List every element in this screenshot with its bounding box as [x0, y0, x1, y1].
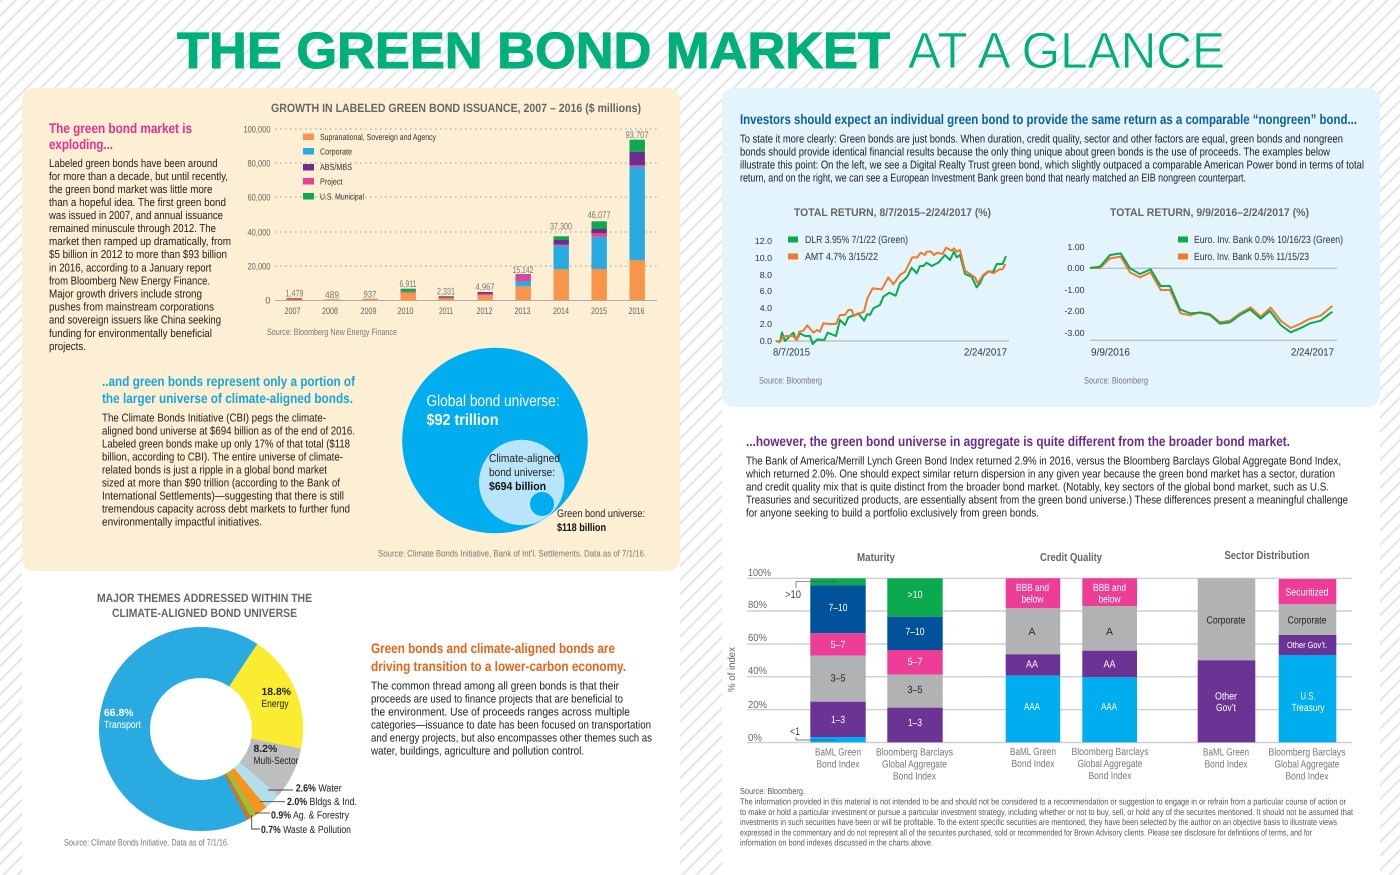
text block: however the green bond universe: for anyone seeking to build a portfolio exclusively from green bonds.	[746, 508, 1039, 520]
donut labels: Multi-Sector	[254, 756, 299, 767]
panel: aggregate universe comparison	[727, 433, 1353, 848]
disclaimer	[740, 786, 1353, 848]
line chart: DLR vs AMT total return: 8/7/2015	[773, 348, 810, 358]
sector: BaML green: Gov’t	[1216, 703, 1236, 714]
credit: Bloomberg Barclays: BBB and	[1093, 583, 1126, 594]
sector: Bloomberg Barclays: Treasury	[1292, 703, 1325, 714]
panel: white lower right background	[722, 395, 1380, 875]
title	[177, 22, 1225, 79]
credit: Bloomberg Barclays: AAA	[1101, 702, 1117, 713]
maturity callouts: >10	[785, 589, 801, 601]
text block: transition to a lower-carbon economy: and energy projects, but also encompasses other themes such as	[371, 732, 652, 744]
chart: nested bond universe circles: $694 billion	[489, 481, 546, 493]
bar value labels: 46,077	[588, 210, 610, 221]
line chart: DLR vs AMT total return: 4.0	[760, 303, 772, 313]
maturity: BaML green: 5–7	[830, 640, 846, 651]
bar chart: growth in labeled green bond issuance	[244, 101, 657, 337]
bar captions: Bond Index	[1012, 759, 1055, 770]
maturity: Bloomberg Barclays: >10	[908, 590, 923, 601]
percent axis	[727, 568, 771, 744]
percent axis: 80%	[748, 600, 767, 611]
bar captions: Bond Index	[1088, 771, 1132, 782]
text block: the green bond market is exploding: was issued in 2007, and annual issuance	[48, 210, 223, 222]
line chart: Euro. Inv. Bank total return: Euro. Inv. Bank 0.0% 10/16/23 (Green)	[1194, 235, 1343, 246]
line chart: DLR vs AMT total return: 2.0	[760, 319, 772, 329]
bar captions: BaML Green	[815, 748, 861, 758]
year labels: 2008	[322, 305, 338, 316]
text block: transition to a lower-carbon economy	[370, 640, 652, 758]
panel: white lower left background	[22, 560, 680, 875]
percent axis: 100%	[748, 568, 771, 579]
text block: the green bond market is exploding: for more than a decade, but until recently,	[49, 171, 228, 183]
column headings	[857, 550, 1310, 564]
text block: the green bond market is exploding: Labeled green bonds have been around	[49, 158, 218, 170]
text block: investors should expect	[740, 111, 1364, 184]
sector: Bloomberg Barclays: U.S.	[1300, 692, 1316, 702]
year labels: 2012	[476, 305, 492, 316]
sector: Bloomberg Barclays	[1279, 579, 1336, 742]
donut labels: 0.7% Waste & Pollution	[261, 825, 351, 836]
text block: transition to a lower-carbon economy: water, buildings, agriculture and pollution control.	[370, 746, 584, 758]
source: Source: Climate Bonds Initiative. Data as of 7/1/16.	[64, 838, 229, 848]
donut labels: 0.9% Ag. & Forestry	[271, 810, 350, 822]
text block: only a portion of climate-aligned bonds	[102, 373, 355, 528]
y axis labels	[244, 124, 270, 306]
text block: the green bond market is exploding: funding for environmentally beneficial	[49, 328, 212, 340]
bar value labels: 93,707	[626, 130, 648, 141]
maturity: Bloomberg Barclays: 7–10	[906, 627, 925, 638]
year labels: 2015	[591, 305, 607, 316]
y axis labels: 60,000	[248, 192, 270, 202]
line chart: DLR vs AMT total return: Source: Bloomberg	[759, 376, 822, 386]
legend	[303, 132, 436, 202]
chart: nested bond universe circles: $118 billion	[557, 522, 606, 534]
bar value labels: 1,479	[286, 288, 304, 300]
maturity callouts: <1	[790, 726, 800, 738]
sector: Bloomberg Barclays: Other Gov’t.	[1287, 640, 1327, 650]
text block: only a portion of climate-aligned bonds: sized at more than $90 trillion (according to the Bank of	[102, 478, 341, 490]
text block: the green bond market is exploding: the green bond market was little more	[49, 184, 212, 196]
credit: BaML green: below	[1022, 594, 1044, 606]
text block: the green bond market is exploding: exploding...	[49, 136, 113, 152]
bar captions: Global Aggregate	[1078, 759, 1143, 770]
credit: Bloomberg Barclays: A	[1106, 627, 1113, 638]
disclaimer: Source: Bloomberg.	[740, 786, 805, 796]
bar captions: Bloomberg Barclays	[1268, 748, 1346, 758]
text block: transition to a lower-carbon economy: Green bonds and climate-aligned bonds are	[371, 640, 615, 656]
text block: only a portion of climate-aligned bonds: tremendous capacity across debt markets to further fund	[102, 504, 350, 516]
line chart: Euro. Inv. Bank total return: 0.00	[1067, 263, 1085, 273]
chart: nested bond universe circles	[378, 348, 646, 558]
stacked bar charts: maturity, credit quality, sector	[727, 550, 1352, 782]
source: Source: Bloomberg New Energy Finance	[267, 327, 397, 337]
y axis labels: 80,000	[248, 158, 270, 168]
column headings: Sector Distribution	[1224, 550, 1310, 562]
line chart: DLR vs AMT total return: DLR 3.95% 7/1/22 (Green)	[805, 235, 908, 246]
line chart: DLR vs AMT total return: 8.0	[760, 270, 772, 280]
text block: the green bond market is exploding: $5 billion in 2012 to more than $93 billion	[49, 249, 227, 261]
y axis labels: 40,000	[248, 226, 270, 238]
chart title: MAJOR THEMES ADDRESSED WITHIN THE	[97, 591, 312, 605]
bar captions: Bloomberg Barclays	[1072, 747, 1148, 758]
year labels: 2010	[398, 305, 414, 316]
line chart: Euro. Inv. Bank total return: Euro. Inv. Bank 0.5% 11/15/23	[1194, 252, 1309, 263]
line chart: DLR vs AMT total return: 2/24/2017	[964, 348, 1007, 358]
bar value labels: 15,142	[512, 265, 534, 276]
bar captions: Global Aggregate	[882, 760, 947, 770]
text block: the green bond market is exploding: from Bloomberg New Energy Finance.	[49, 276, 210, 288]
text block: the green bond market is exploding: projects.	[49, 341, 86, 353]
year labels: 2014	[553, 305, 569, 316]
maturity: Bloomberg Barclays: 1–3	[908, 718, 922, 729]
panel: issuance growth and universe (beige)	[22, 88, 680, 571]
donut labels: 8.2%	[254, 744, 277, 755]
chart title: CLIMATE-ALIGNED BOND UNIVERSE	[112, 606, 297, 620]
text block: only a portion of climate-aligned bonds: aligned bond universe at $694 billion as of the end of 2016.	[102, 426, 355, 438]
bar value labels: 37,300	[550, 222, 572, 232]
chart title	[97, 591, 312, 620]
line chart: DLR vs AMT total return	[755, 207, 1009, 386]
line chart: Euro. Inv. Bank total return: 1.00	[1067, 242, 1085, 252]
column headings: Credit Quality	[1040, 552, 1102, 564]
line chart: Euro. Inv. Bank total return: -2.00	[1064, 306, 1085, 316]
year labels: 2016	[628, 305, 644, 316]
maturity callouts	[785, 582, 836, 740]
text block: only a portion of climate-aligned bonds: related bonds is just a ripple in a global bond market	[102, 464, 328, 476]
donut labels: 2.0% Bldgs & Ind.	[287, 797, 357, 808]
credit: BaML green: A	[1029, 627, 1036, 638]
text block: the green bond market is exploding: Major growth drivers include strong	[49, 288, 202, 300]
chart title: GROWTH IN LABELED GREEN BOND ISSUANCE, 2007 – 2016 ($ millions)	[271, 101, 641, 115]
column headings: Maturity	[857, 552, 896, 564]
credit: Bloomberg Barclays: below	[1098, 594, 1121, 606]
text block: only a portion of climate-aligned bonds: The Climate Bonds Initiative (CBI) pegs the climate-	[102, 412, 326, 424]
percent axis: 0%	[748, 733, 762, 744]
text block: transition to a lower-carbon economy: the environment. Use of proceeds ranges across multiple	[371, 706, 630, 718]
year labels: 2013	[514, 305, 530, 316]
bar captions: Bond Index	[1204, 760, 1248, 770]
legend: Supranational, Sovereign and Agency	[320, 132, 436, 142]
line chart: DLR vs AMT total return: 12.0	[755, 236, 772, 246]
donut chart	[93, 621, 309, 837]
line chart: Euro. Inv. Bank total return: -3.00	[1064, 328, 1085, 338]
line chart: DLR vs AMT total return: 10.0	[755, 253, 772, 263]
sector: Bloomberg Barclays: Corporate	[1288, 616, 1327, 626]
bar value labels: 2,331	[437, 286, 455, 298]
text block: only a portion of climate-aligned bonds: billion, according to CBI). The entire universe of climate-	[102, 452, 343, 464]
chart: nested bond universe circles: Global bond universe:	[426, 393, 560, 410]
bar captions: Global Aggregate	[1274, 760, 1340, 770]
bar value labels: 489	[325, 290, 339, 301]
year labels: 2011	[439, 305, 453, 316]
bar value labels: 4,967	[476, 282, 494, 293]
text block: however the green bond universe: ...however, the green bond universe in aggregate is quite different from the broader bond market.	[746, 433, 1290, 449]
year labels: 2007	[284, 305, 300, 316]
year labels: 2009	[360, 305, 376, 316]
credit: BaML green	[1006, 578, 1060, 742]
maturity: Bloomberg Barclays: 3–5	[908, 685, 923, 696]
text block: transition to a lower-carbon economy: The common thread among all green bonds is that their	[371, 680, 619, 692]
sector: BaML green	[1198, 578, 1255, 742]
text block: only a portion of climate-aligned bonds: environmentally impactful initiatives.	[102, 516, 262, 528]
line chart: Euro. Inv. Bank total return: -1.00	[1064, 285, 1085, 295]
text block: the green bond market is exploding: remained minuscule through 2012. The	[49, 223, 216, 235]
bar captions: BaML Green	[1203, 748, 1249, 758]
maturity: BaML green: 3–5	[830, 674, 846, 684]
text block: only a portion of climate-aligned bonds: ..and green bonds represent only a portion of	[102, 373, 355, 389]
chart: nested bond universe circles: $92 trillion	[426, 412, 498, 429]
line chart: DLR vs AMT total return: TOTAL RETURN, 8/7/2015–2/24/2017 (%)	[794, 207, 991, 219]
text block: the green bond market is exploding: market then ramped up dramatically, from	[49, 236, 231, 248]
percent axis: 60%	[748, 633, 767, 644]
line chart: Euro. Inv. Bank total return: 2/24/2017	[1291, 348, 1334, 358]
credit: BaML green: AA	[1026, 660, 1038, 670]
percent axis: 40%	[748, 666, 767, 677]
y axis labels: 20,000	[248, 260, 270, 272]
legend: U.S. Municipal	[320, 192, 364, 202]
sector: BaML green: Other	[1215, 692, 1237, 702]
bar captions: Bond Index	[816, 760, 860, 770]
donut labels: 66.8%	[104, 708, 133, 719]
percent axis: 20%	[748, 700, 767, 711]
text block: investors should expect: return, and on the right, we can see a European Investment Bank green bond that nearly matched an EIB nongreen counterpart.	[740, 172, 1246, 184]
text block: however the green bond universe	[745, 433, 1348, 520]
donut labels: 2.6% Water	[296, 784, 342, 794]
maturity: Bloomberg Barclays	[887, 578, 943, 742]
line chart: Euro. Inv. Bank total return	[1064, 207, 1343, 386]
credit: BaML green: BBB and	[1016, 583, 1049, 594]
maturity: BaML green	[810, 578, 866, 742]
maturity: Bloomberg Barclays: 5–7	[908, 657, 923, 668]
maturity: BaML green: 1–3	[831, 715, 845, 726]
sector: BaML green: Corporate	[1206, 616, 1246, 626]
text block: the green bond market is exploding: than a hopeful idea. The first green bond	[49, 197, 226, 209]
text block: the green bond market is exploding: and sovereign issuers like China seeking	[49, 314, 221, 326]
bar captions: Bloomberg Barclays	[876, 748, 953, 758]
donut labels	[104, 687, 357, 836]
legend: ABS/MBS	[320, 162, 352, 172]
text block: transition to a lower-carbon economy: categories—issuance to date has been focused on transportation	[371, 720, 651, 732]
chart: nested bond universe circles: Green bond universe:	[557, 508, 645, 520]
credit: BaML green: AAA	[1024, 702, 1040, 713]
chart: nested bond universe circles: Source: Climate Bonds Initiative, Bank of Int'l. Settlements. Data as of 7/1/16.	[378, 548, 646, 558]
donut labels: Energy	[262, 699, 289, 710]
y axis labels: 0	[265, 294, 270, 306]
credit: Bloomberg Barclays	[1082, 578, 1137, 742]
disclaimer: information on bond indexes discussed in the charts above.	[740, 838, 933, 848]
credit: Bloomberg Barclays: AA	[1104, 660, 1116, 670]
bar value labels: 6,911	[400, 279, 416, 290]
chart: nested bond universe circles: Climate-aligned	[489, 453, 560, 465]
panel: major themes donut	[64, 591, 652, 848]
title: AT A GLANCE	[908, 22, 1225, 79]
text block: transition to a lower-carbon economy: driving transition to a lower-carbon economy.	[371, 658, 626, 674]
maturity: BaML green: 7–10	[828, 603, 848, 614]
line chart: Euro. Inv. Bank total return: Source: Bloomberg	[1084, 376, 1148, 386]
text block: the green bond market is exploding: in 2016, according to a January report	[49, 262, 212, 274]
bar captions: Bond Index	[1286, 772, 1329, 782]
text block: only a portion of climate-aligned bonds: the larger universe of climate-aligned bonds.	[102, 390, 353, 406]
text block: the green bond market is exploding	[48, 120, 231, 353]
text block: the green bond market is exploding: The green bond market is	[49, 120, 192, 136]
text block: transition to a lower-carbon economy: proceeds are used to finance projects that are beneficial to	[371, 694, 623, 706]
title: THE GREEN BOND MARKET	[177, 22, 890, 79]
year labels	[284, 305, 644, 316]
panel: total return comparison (blue)	[722, 88, 1380, 407]
sector: Bloomberg Barclays: Securitized	[1286, 588, 1329, 598]
bar captions: Bond Index	[893, 772, 937, 782]
legend: Corporate	[320, 146, 352, 156]
text block: only a portion of climate-aligned bonds: International Settlements)—suggesting that there is still	[102, 490, 344, 502]
percent axis: % of index	[727, 646, 738, 692]
line chart: DLR vs AMT total return: 0.0	[760, 336, 772, 346]
bar captions: BaML Green	[1010, 747, 1056, 758]
line chart: DLR vs AMT total return: AMT 4.7% 3/15/22	[805, 252, 878, 263]
text block: the green bond market is exploding: pushes from mainstream corporations	[49, 302, 214, 314]
bar value labels: 937	[364, 290, 376, 300]
y axis labels: 100,000	[244, 124, 270, 134]
bar captions	[815, 747, 1346, 782]
chart: nested bond universe circles: bond universe:	[489, 467, 555, 479]
text block: only a portion of climate-aligned bonds: Labeled green bonds make up only 17% of that total ($118	[102, 438, 350, 450]
line chart: Euro. Inv. Bank total return: 9/9/2016	[1091, 348, 1130, 358]
line chart: DLR vs AMT total return: 6.0	[760, 286, 772, 296]
donut labels: Transport	[104, 720, 141, 731]
line chart: Euro. Inv. Bank total return: TOTAL RETURN, 9/9/2016–2/24/2017 (%)	[1110, 207, 1309, 219]
stacked bars	[286, 140, 645, 300]
legend: Project	[320, 176, 343, 186]
bar value labels	[286, 130, 648, 301]
donut labels: 18.8%	[262, 687, 291, 698]
